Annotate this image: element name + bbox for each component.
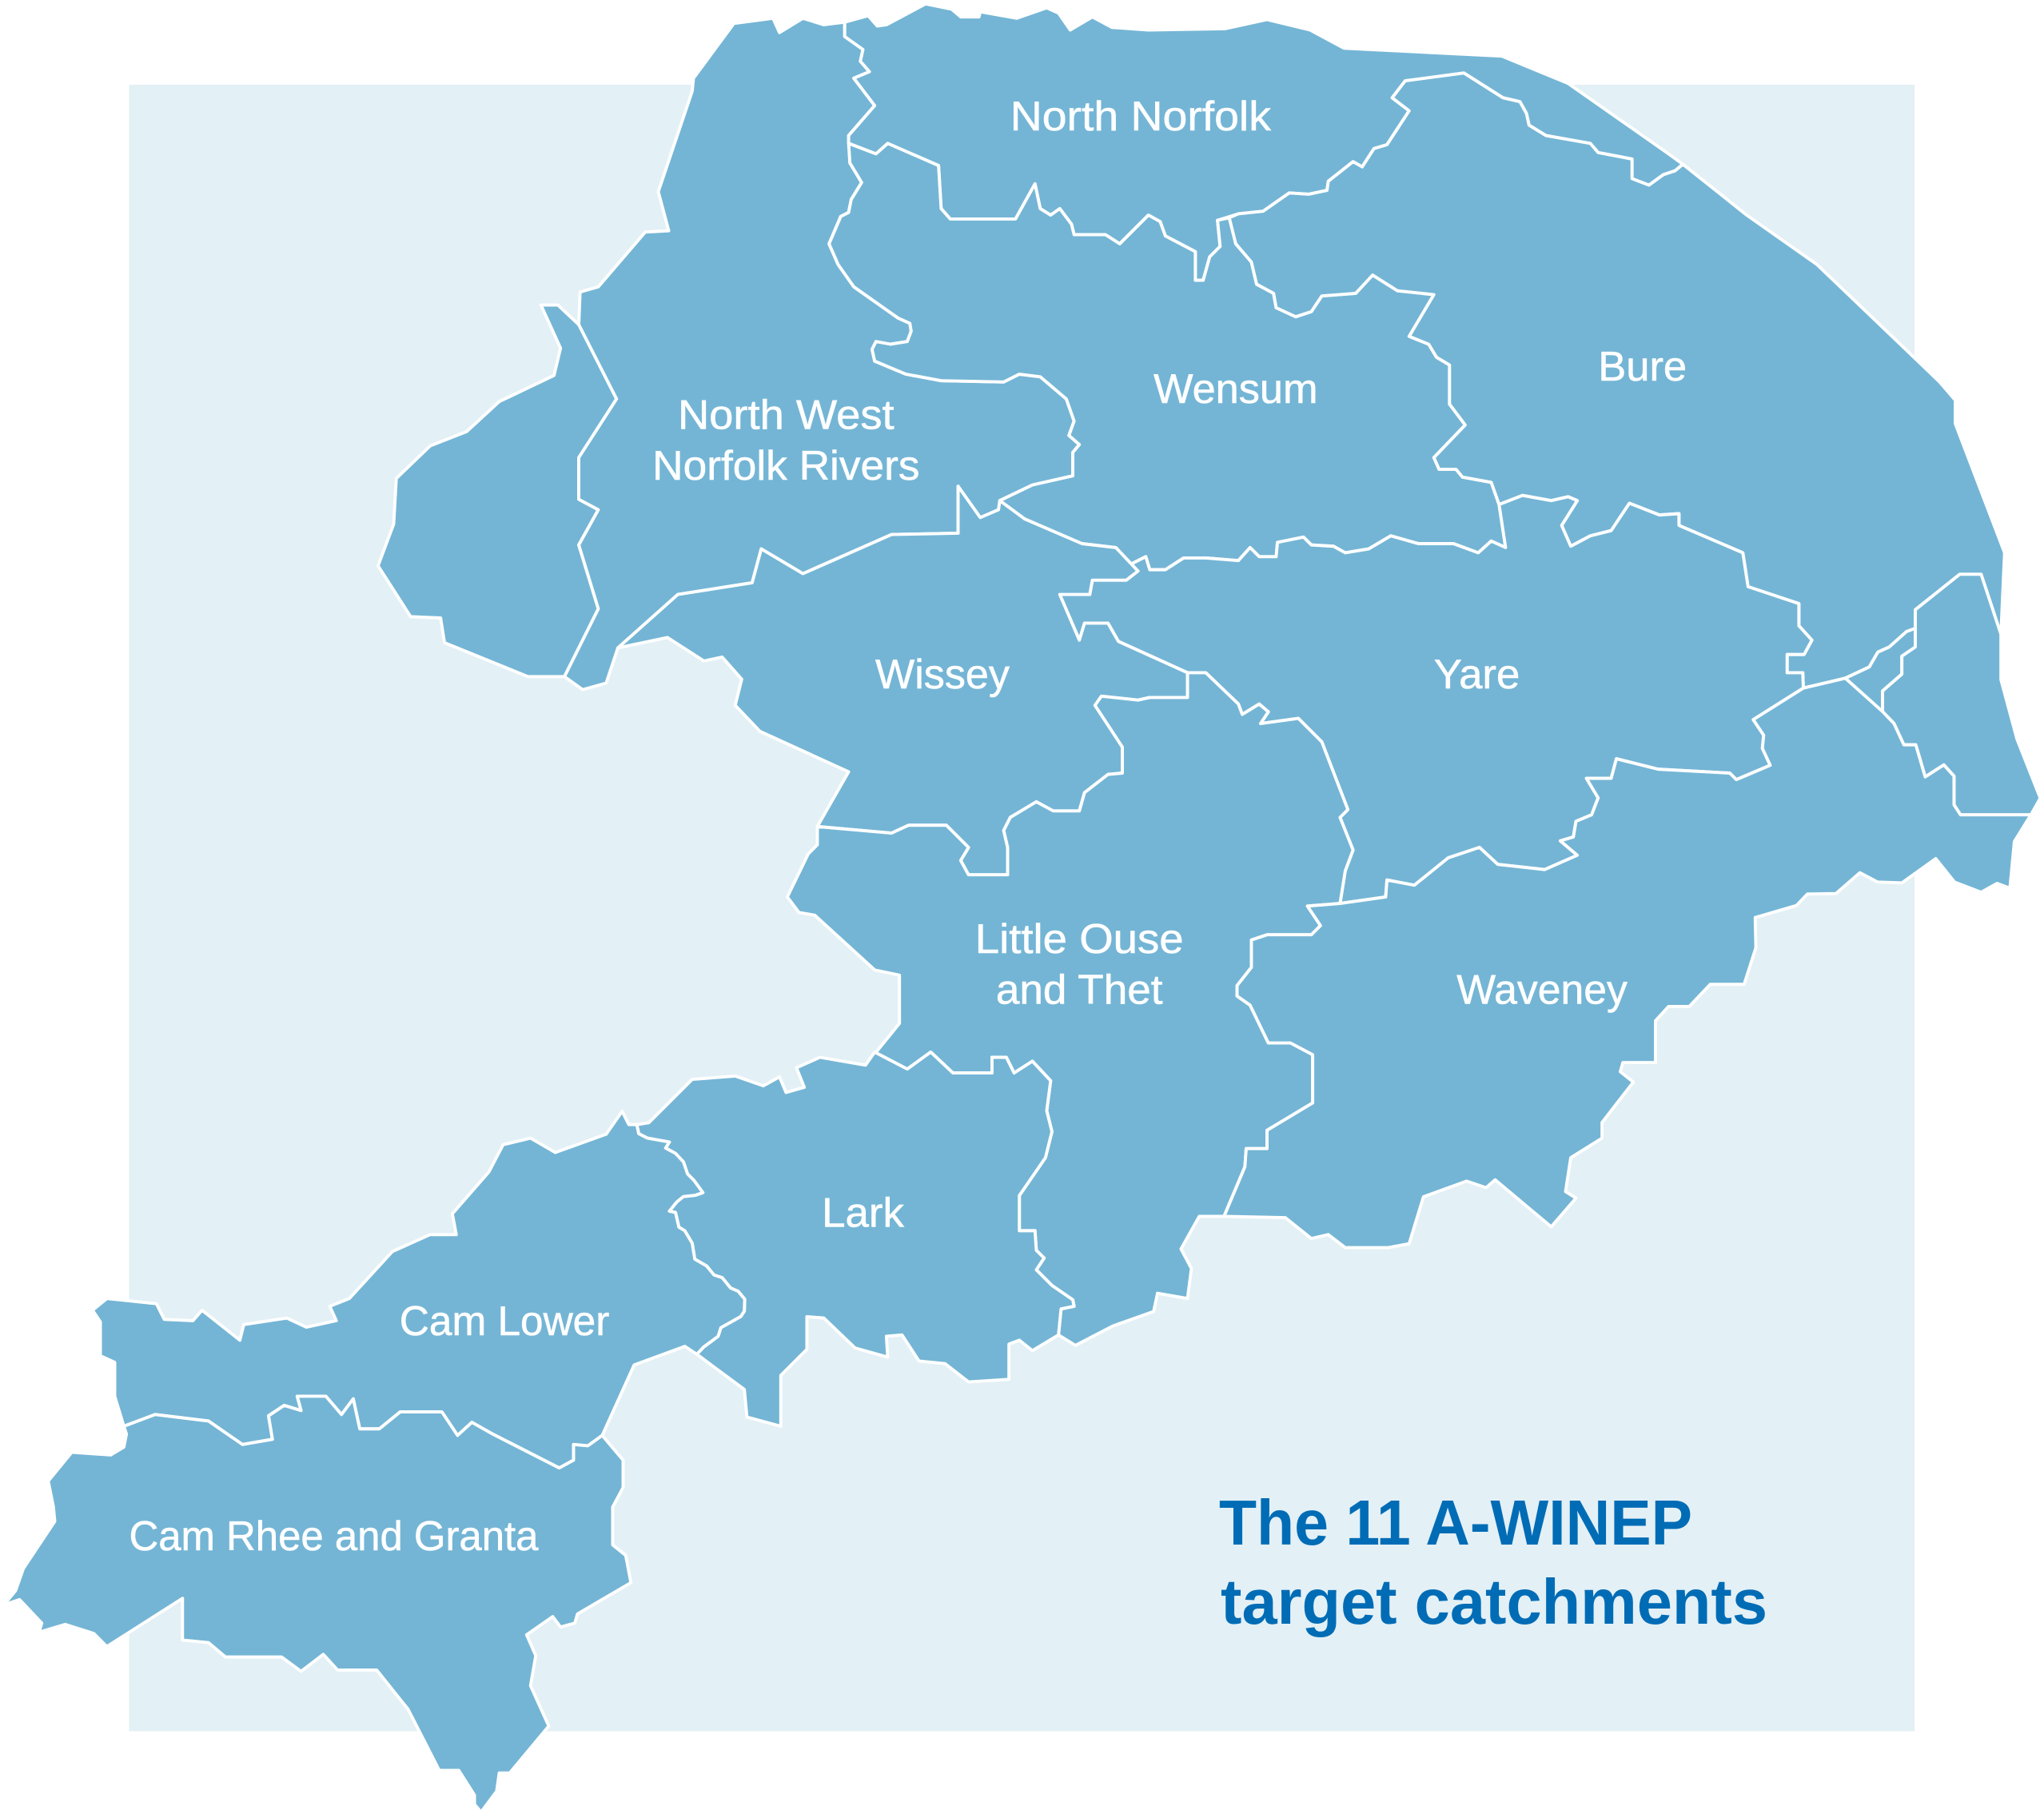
catchment: Bure: Bure [1598, 344, 1687, 390]
catchment: Wensum: Wensum [1153, 366, 1318, 413]
catchment: Cam Rhee and Granta [4, 1396, 631, 1812]
region: west lobe [378, 305, 616, 676]
catchment: North West Norfolk Rivers: North West [678, 393, 894, 439]
catchment: Yare [1060, 496, 1812, 903]
region: eastern wedge [1845, 628, 1915, 712]
catchment: North West Norfolk Rivers: Norfolk Rivers [652, 443, 919, 489]
catchment: Wissey: Wissey [875, 652, 1010, 698]
catchment: Little Ouse and Thet [787, 672, 1353, 1346]
catchment: Cam Lower [93, 1111, 745, 1468]
title [1219, 1487, 1767, 1637]
catchment: Waveney: Waveney [1456, 967, 1628, 1014]
title: The 11 A-WINEP [1219, 1487, 1692, 1558]
region: eastern coast [1883, 574, 2040, 815]
catchment: North West Norfolk Rivers [564, 18, 1079, 690]
catchment: Wensum [829, 143, 1505, 570]
catchment: North Norfolk: North Norfolk [1010, 94, 1272, 140]
catchment: Lark [637, 1052, 1074, 1426]
catchment: Wissey [618, 486, 1188, 875]
catchment: Cam Rhee and Granta: Cam Rhee and Granta [129, 1513, 539, 1560]
background panel [129, 85, 1915, 1732]
catchment: Little Ouse and Thet: and Thet [996, 967, 1163, 1014]
catchment: Lark: Lark [822, 1190, 905, 1236]
catchment: Yare: Yare [1434, 652, 1520, 698]
catchment: North Norfolk [845, 4, 1683, 281]
catchment: Little Ouse and Thet: Little Ouse [975, 916, 1184, 963]
catchment: Waveney [1224, 678, 2031, 1248]
catchment: Cam Lower: Cam Lower [400, 1298, 609, 1345]
catchment: Bure [1229, 73, 2005, 688]
title: target catchments [1221, 1566, 1767, 1637]
